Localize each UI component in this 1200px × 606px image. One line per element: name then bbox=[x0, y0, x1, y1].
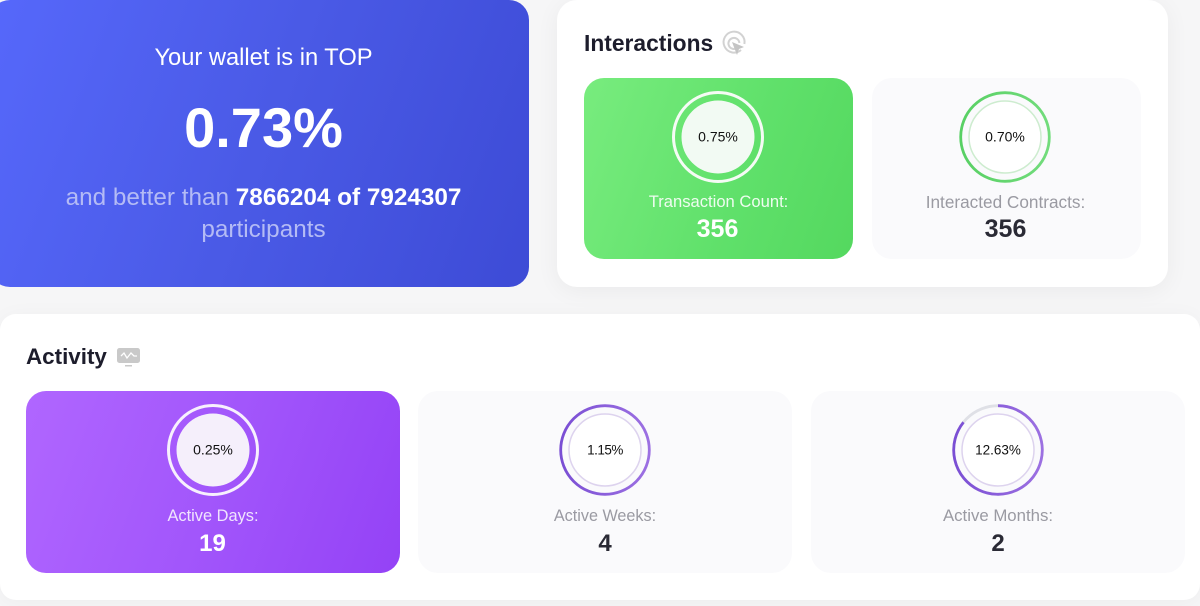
value: 4 bbox=[598, 530, 612, 557]
card: active months bbox=[811, 391, 1185, 573]
progress ring 1.15% bbox=[559, 404, 651, 496]
label: Active Weeks: bbox=[554, 507, 656, 525]
value: 2 bbox=[991, 530, 1005, 557]
big percentage: 0.73% bbox=[184, 96, 343, 159]
label: Interacted Contracts: bbox=[926, 192, 1085, 212]
panel: activity bbox=[0, 314, 1200, 600]
card: interacted contracts bbox=[872, 78, 1141, 259]
progress ring 0.25%: 0.25% bbox=[193, 442, 233, 458]
progress ring 0.25% bbox=[167, 404, 259, 496]
participants text: participants bbox=[201, 216, 326, 243]
value: 356 bbox=[985, 215, 1026, 243]
progress ring 0.75% bbox=[672, 91, 764, 183]
card: active days bbox=[26, 391, 400, 573]
participants text: and better than 7866204 of 7924307 bbox=[66, 184, 461, 211]
label: Active Months: bbox=[943, 506, 1053, 525]
icon: monitor pulse bbox=[117, 348, 140, 366]
icon: cursor click bbox=[722, 30, 746, 55]
participants text bbox=[66, 184, 461, 243]
progress ring 0.70%: 0.70% bbox=[985, 128, 1025, 144]
progress ring 12.63%: 12.63% bbox=[975, 442, 1021, 458]
panel: wallet rank bbox=[0, 0, 529, 287]
progress ring 1.15%: 1.15% bbox=[587, 442, 623, 458]
heading: your wallet is in top: Your wallet is in TOP bbox=[154, 45, 373, 71]
progress ring 0.75%: 0.75% bbox=[698, 128, 738, 144]
card: active weeks bbox=[418, 391, 792, 573]
value: 356 bbox=[697, 215, 738, 243]
card: transaction count bbox=[584, 78, 853, 259]
label: Transaction Count: bbox=[649, 192, 788, 211]
value: 19 bbox=[199, 530, 226, 557]
heading: activity: Activity bbox=[26, 344, 107, 369]
progress ring 12.63% bbox=[952, 404, 1044, 496]
heading: interactions: Interactions bbox=[584, 30, 713, 56]
progress ring 0.70% bbox=[959, 91, 1051, 183]
label: Active Days: bbox=[167, 507, 259, 525]
panel: interactions bbox=[557, 0, 1168, 287]
